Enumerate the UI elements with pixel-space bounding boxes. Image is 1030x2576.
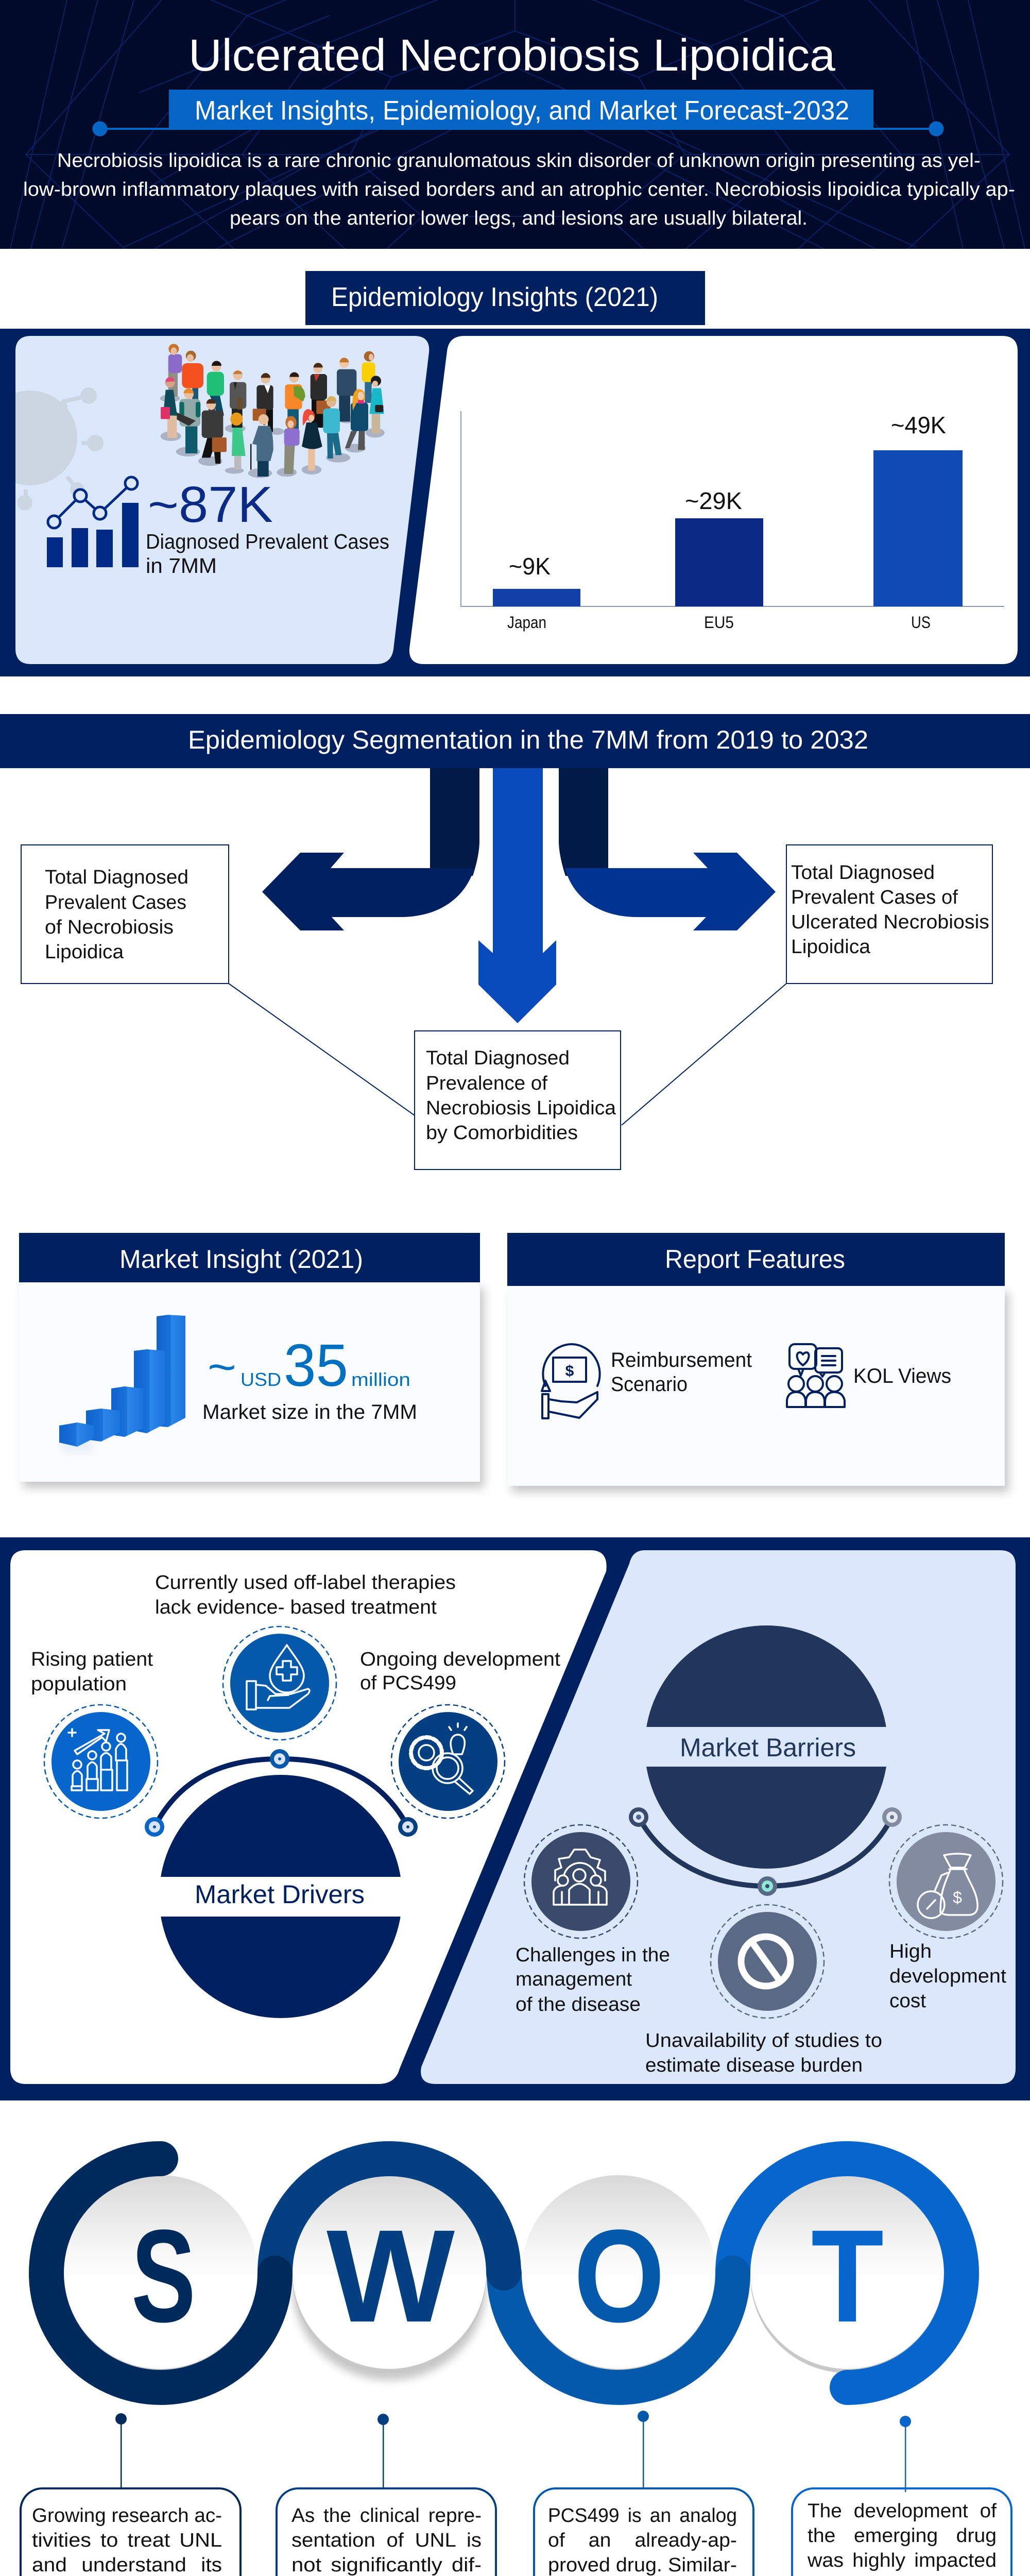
letter O: O	[574, 2202, 665, 2350]
disc: O	[522, 2175, 715, 2373]
SWOT card: opportunities: proved drug. Similar-	[548, 2554, 737, 2576]
intro paragraph: low-brown inflammatory plaques with raised borders and an atrophic center. Necrobiosis lipoidica typically ap-	[23, 179, 1015, 200]
label: diagnosed prevalent cases: Diagnosed Prevalent Cases	[146, 530, 389, 553]
bar: Japan	[493, 553, 580, 632]
ribbon: O	[504, 2273, 733, 2387]
icon: hand and drop	[223, 1626, 336, 1740]
intro paragraph: pears on the anterior lower legs, and lesions are usually bilateral.	[230, 208, 808, 229]
arc: drivers connector	[154, 1759, 408, 1827]
text: $: $	[565, 1363, 574, 1380]
box: total diagnosed prevalent cases of UNL: Ulcerated Necrobiosis	[791, 911, 989, 933]
text: off-label therapies: lack evidence- based treatment	[155, 1597, 437, 1618]
icon: crowd of people	[160, 344, 385, 478]
disc: S	[64, 2175, 258, 2373]
box: prevalence by comorbidities: Prevalence of	[426, 1073, 547, 1094]
box: prevalence by comorbidities	[415, 1031, 621, 1170]
box: total diagnosed prevalent cases of NL: Total Diagnosed	[45, 867, 188, 888]
arrow: centre	[478, 768, 556, 1023]
stat: market size: USD	[241, 1369, 281, 1390]
subtitle banner	[93, 90, 943, 136]
icon: KOL views	[787, 1344, 845, 1407]
SWOT card: strengths	[21, 2413, 241, 2576]
ribbon: T	[733, 2159, 962, 2387]
circle: market barriers	[641, 1625, 891, 1869]
header panel	[0, 0, 1030, 249]
intro paragraph	[23, 150, 1015, 229]
man black suit centre	[253, 373, 273, 432]
SWOT card: strengths: and understand its	[32, 2554, 222, 2576]
woman teal front	[161, 377, 177, 438]
label: KOL views: KOL Views	[853, 1365, 951, 1387]
node: bottom	[758, 1876, 777, 1896]
node: left	[629, 1807, 648, 1827]
man blue suit	[337, 358, 356, 421]
bar: Japan: ~9K	[509, 553, 551, 580]
SWOT card: threats: The development of	[808, 2500, 997, 2522]
label: reimbursement scenario: Scenario	[611, 1373, 688, 1396]
text: unavailability of studies: Unavailability of studies to	[645, 2030, 882, 2052]
connector lines	[229, 984, 786, 1125]
label: reimbursement scenario: Reimbursement	[611, 1349, 752, 1371]
man green hoodie	[207, 361, 224, 416]
icon: gear, magnifier and bulb	[391, 1705, 505, 1818]
heading: Market Insight (2021)	[119, 1245, 363, 1274]
text: ongoing development: of PCS499	[360, 1672, 456, 1694]
man orange hoodie	[182, 351, 203, 403]
text: challenges: Challenges in the	[516, 1944, 670, 1966]
SWOT card: threats	[792, 2416, 1011, 2576]
SWOT card: strengths: tivities to treat UNL	[32, 2530, 222, 2551]
man orange with backpack	[285, 372, 305, 433]
SWOT card: opportunities	[534, 2411, 753, 2576]
bar: US: US	[911, 613, 931, 632]
box: total diagnosed prevalent cases of NL: Prevalent Cases	[45, 892, 186, 913]
text: off-label therapies: Currently used off-label therapies	[155, 1572, 456, 1594]
text: unavailability of studies	[645, 2030, 882, 2076]
woman dark coat	[345, 389, 368, 450]
title: Ulcerated Necrobiosis Lipoidica	[188, 30, 836, 80]
stat: market size: million	[351, 1369, 410, 1390]
text: high development cost	[889, 1941, 1006, 2012]
man light blue shirt	[323, 396, 341, 459]
woman teal dress	[369, 376, 384, 434]
letter W: W	[327, 2202, 455, 2350]
ribbon: S	[46, 2159, 275, 2387]
stat: 87K: ~87K	[148, 476, 273, 533]
text: challenges: of the disease	[516, 1994, 641, 2015]
box: total diagnosed prevalent cases of NL: of Necrobiosis	[45, 917, 174, 938]
text: rising patient population: population	[31, 1673, 127, 1695]
text: ongoing development	[360, 1649, 560, 1694]
SWOT card: weaknesses: not significantly dif-	[291, 2554, 482, 2576]
panel: report features	[507, 1233, 1009, 1492]
man vest	[174, 388, 200, 453]
icon: money bag	[889, 1825, 1003, 1938]
node: right	[882, 1807, 902, 1827]
heading: epidemiology segmentation: Epidemiology Segmentation in the 7MM from 2019 to 2032	[188, 725, 868, 754]
box: prevalence by comorbidities: Total Diagnosed	[426, 1047, 570, 1069]
bar: EU5	[675, 487, 763, 632]
node: left	[145, 1817, 164, 1837]
text: high development cost: development	[889, 1965, 1006, 1987]
bar: EU5: EU5	[704, 613, 734, 632]
SWOT card: weaknesses: sentation of UNL is	[291, 2530, 482, 2551]
man black suit right	[311, 363, 331, 428]
heading: epidemiology segmentation	[0, 714, 1030, 768]
bar: US: ~49K	[891, 412, 946, 438]
SWOT card: opportunities: of an already-ap-	[548, 2530, 737, 2551]
woman purple front	[284, 416, 300, 474]
heading	[507, 1233, 1005, 1286]
man black suit laptop	[202, 399, 227, 464]
icon: challenges team gear	[524, 1825, 638, 1938]
letter T: T	[811, 2202, 884, 2350]
woman green coat	[230, 413, 246, 470]
text: off-label therapies	[155, 1572, 456, 1618]
box: prevalence by comorbidities: by Comorbidities	[426, 1122, 578, 1144]
icon: 3D growth bars	[59, 1315, 185, 1453]
heading: Report Features	[665, 1245, 845, 1274]
old man	[250, 414, 273, 477]
stat: market size: 35	[284, 1332, 348, 1399]
node: top	[270, 1749, 289, 1769]
stat: market size	[208, 1332, 410, 1399]
bar: Japan: Japan	[507, 613, 546, 632]
intro paragraph: Necrobiosis lipoidica is a rare chronic granulomatous skin disorder of unknown origin presenting as yel-	[57, 150, 981, 172]
icon: unavailable sign	[711, 1905, 824, 2018]
text: high development cost: cost	[889, 1990, 926, 2012]
SWOT card: weaknesses	[277, 2414, 496, 2576]
box: total diagnosed prevalent cases of UNL: Total Diagnosed	[791, 862, 935, 884]
SWOT card: threats: the emerging drug	[808, 2525, 997, 2547]
ribbon: W	[275, 2159, 504, 2273]
text: unavailability of studies: estimate disease burden	[645, 2055, 863, 2076]
text: rising patient population: Rising patient	[31, 1649, 153, 1670]
text: high development cost: High	[889, 1941, 932, 1962]
node: right	[398, 1817, 418, 1837]
text: challenges: management	[516, 1969, 632, 1990]
heading: Epidemiology Insights	[305, 271, 705, 325]
panel: drivers and barriers band	[0, 1537, 1030, 2100]
text: ongoing development: Ongoing development	[360, 1649, 560, 1670]
man grey suit	[230, 370, 246, 428]
panel: epidemiology band	[0, 329, 1030, 676]
panel: diagnosed prevalent cases	[0, 336, 429, 664]
box: total diagnosed prevalent cases of UNL	[786, 845, 992, 984]
icon: rising population	[44, 1705, 158, 1818]
box: total diagnosed prevalent cases of NL	[21, 845, 229, 984]
icon: virus globe	[15, 387, 104, 511]
disc: T	[750, 2175, 944, 2373]
label: diagnosed prevalent cases: in 7MM	[146, 554, 217, 578]
SWOT ribbon	[46, 2159, 962, 2387]
icon: bar and line chart	[47, 477, 139, 567]
heading: Epidemiology Insights: Epidemiology Insights (2021)	[331, 282, 658, 312]
woman yellow	[362, 351, 375, 403]
SWOT card: strengths: Growing research ac-	[32, 2505, 222, 2527]
woman black dress	[302, 409, 322, 470]
letter S: S	[131, 2202, 196, 2350]
woman purple back	[168, 344, 182, 397]
label: diagnosed prevalent cases	[146, 530, 389, 578]
arc: barriers connector	[639, 1817, 892, 1886]
panel: bar chart	[409, 336, 1018, 664]
icon: money bag: $	[953, 1888, 962, 1907]
box: total diagnosed prevalent cases of UNL: Lipoidica	[791, 936, 871, 958]
circle: market drivers: Market Drivers	[195, 1880, 365, 1909]
label: reimbursement scenario	[611, 1349, 752, 1396]
heading	[19, 1233, 480, 1282]
SWOT card: opportunities: PCS499 is an analog	[548, 2505, 737, 2527]
stat: market size: ~	[208, 1342, 236, 1393]
icon: reimbursement	[542, 1344, 600, 1418]
disc: W	[293, 2175, 486, 2380]
panel: market drivers	[10, 1550, 607, 2084]
panel: market barriers	[421, 1550, 1016, 2084]
SWOT card: weaknesses: As the clinical repre-	[291, 2505, 482, 2527]
subtitle banner: Market Insights, Epidemiology, and Market Forecast-2032	[195, 96, 849, 126]
box: total diagnosed prevalent cases of UNL: Prevalent Cases of	[791, 887, 958, 908]
bar: US	[873, 412, 963, 632]
circle: market drivers	[154, 1775, 407, 2018]
SWOT card: threats: was highly impacted	[807, 2550, 997, 2571]
label: market size in 7MM: Market size in the 7MM	[202, 1401, 417, 1423]
text: challenges	[516, 1944, 670, 2015]
arrow: left	[262, 768, 479, 930]
panel: market insight	[19, 1233, 484, 1488]
bar: EU5: ~29K	[685, 487, 742, 514]
box: total diagnosed prevalent cases of NL: Lipoidica	[45, 941, 124, 963]
text: rising patient population	[31, 1649, 153, 1695]
arrow: right	[559, 768, 776, 930]
box: prevalence by comorbidities: Necrobiosis Lipoidica	[426, 1097, 616, 1119]
circle: market barriers: Market Barriers	[680, 1733, 856, 1762]
